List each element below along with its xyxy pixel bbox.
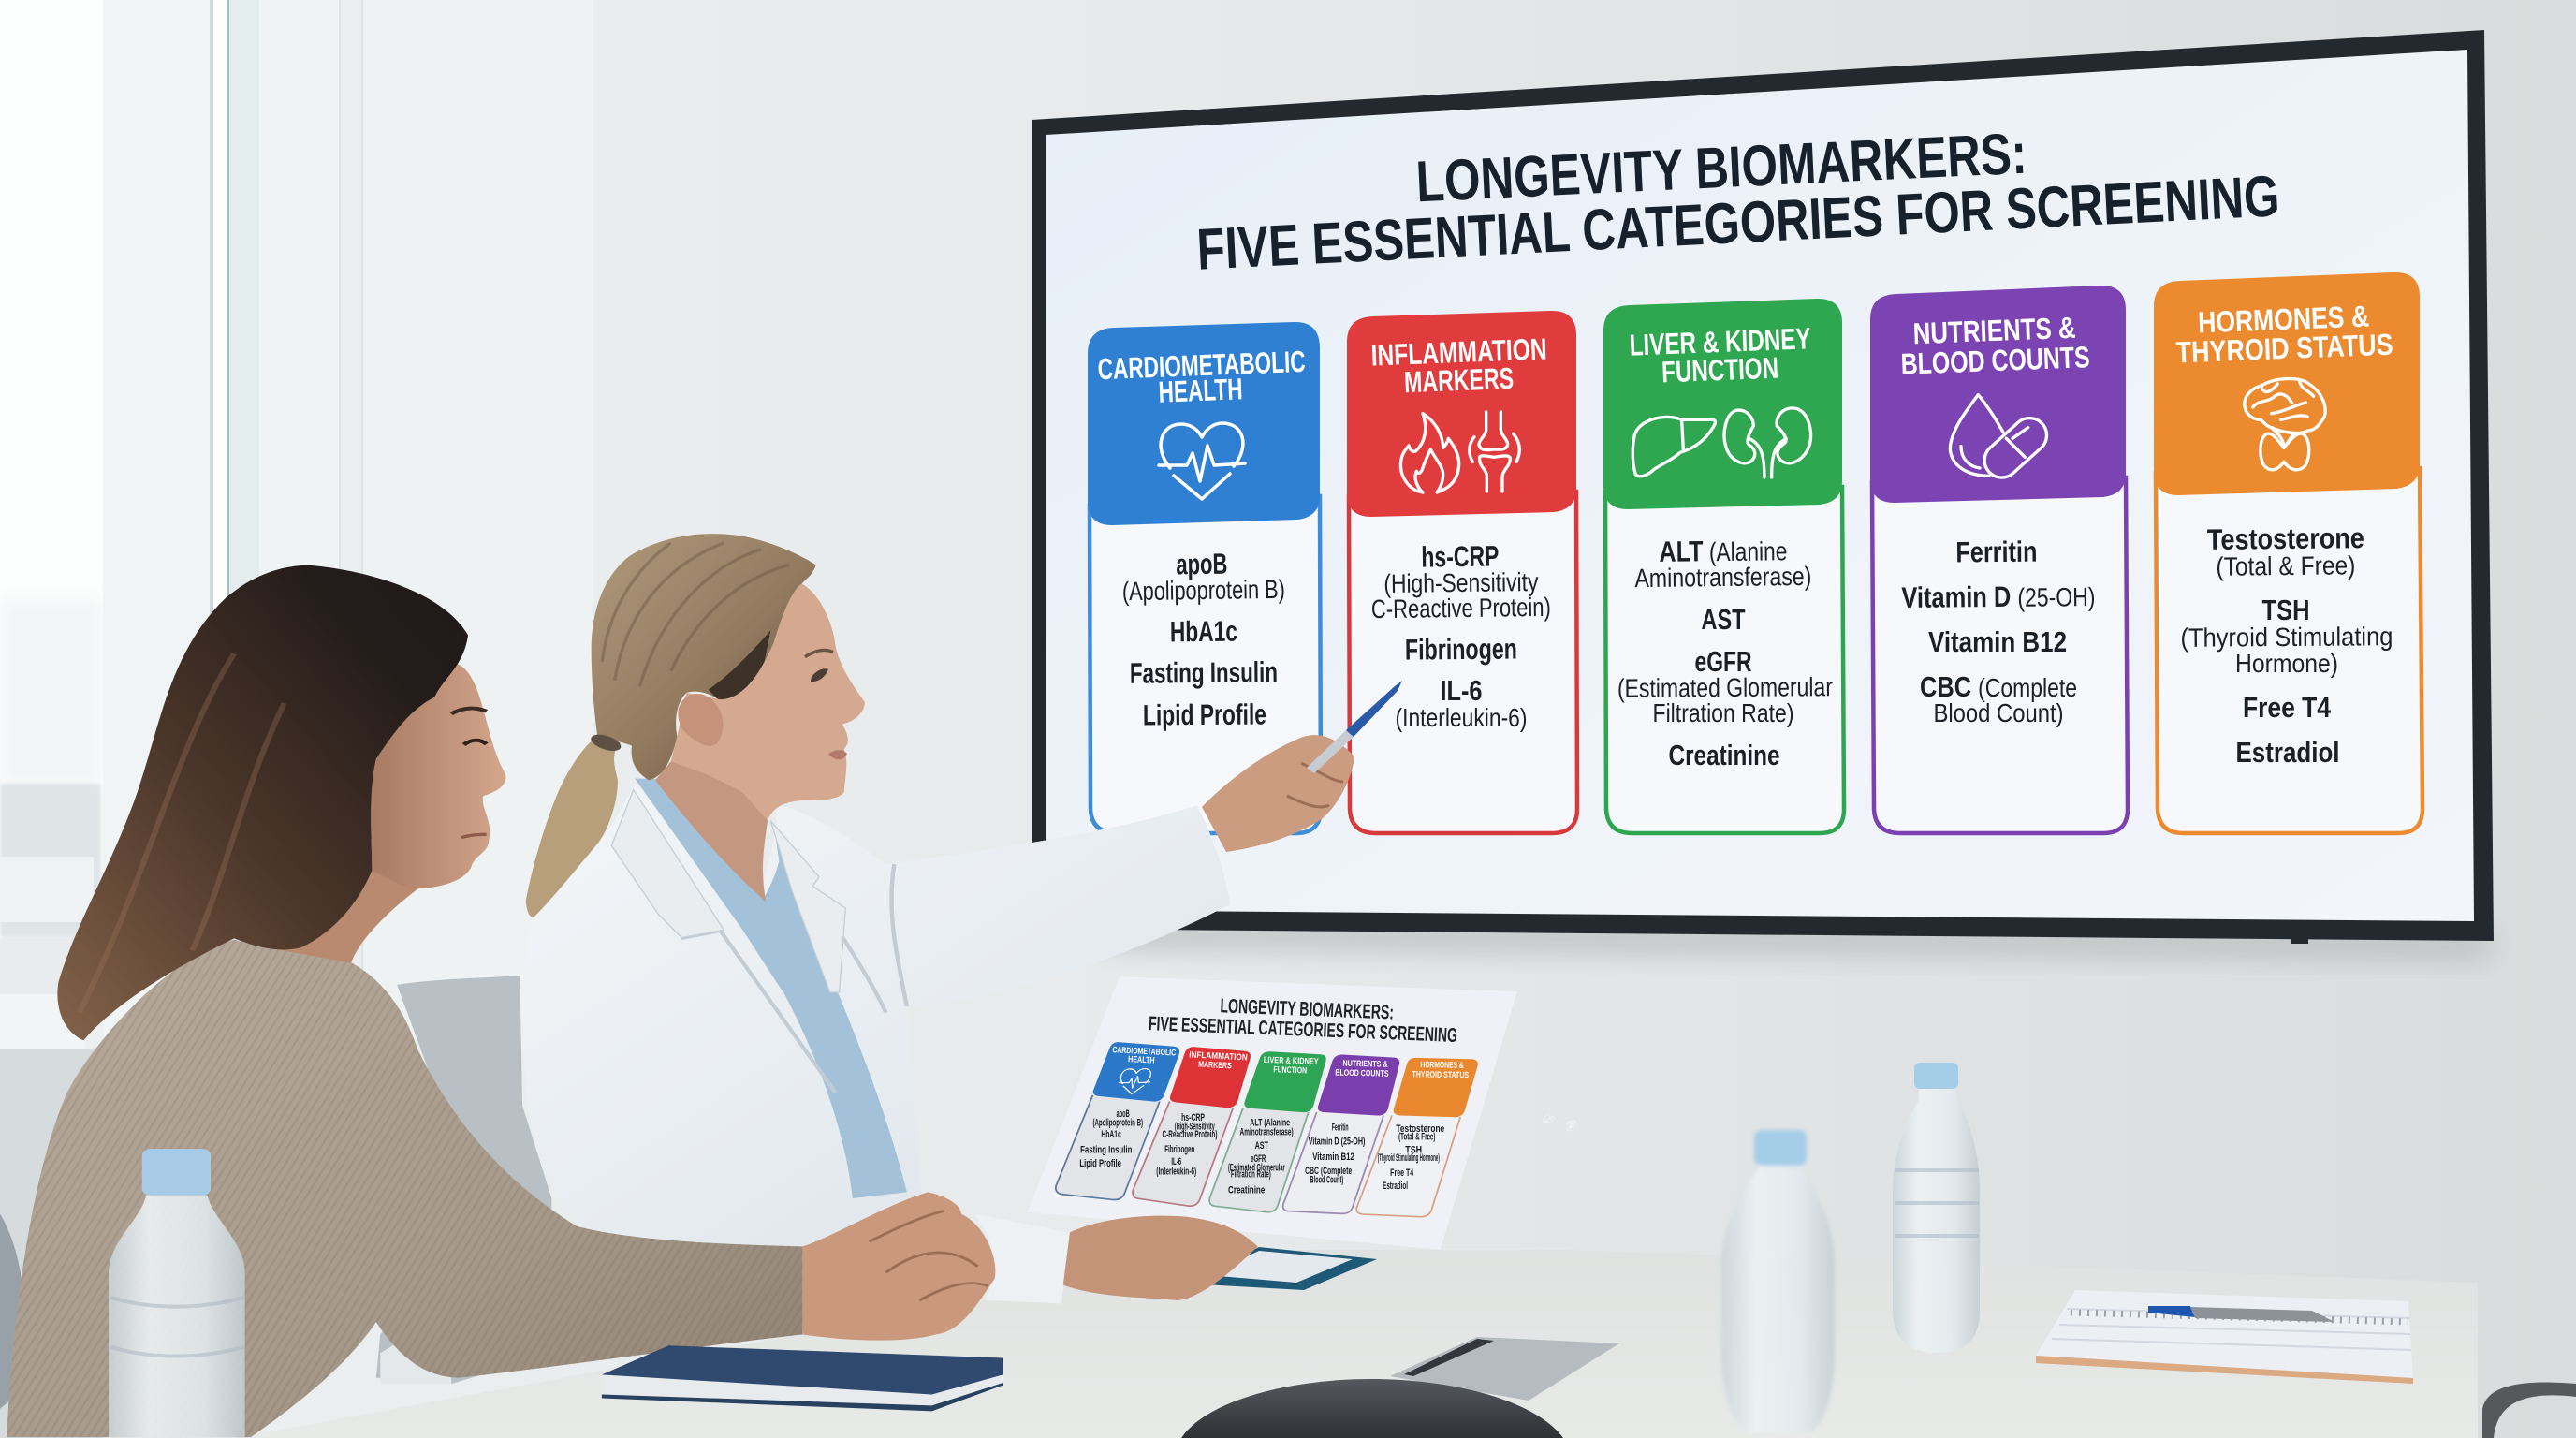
ear — [678, 694, 723, 746]
header: inflammation: INFLAMMATION — [1370, 331, 1547, 373]
biomarker list: Lipid Profile — [1143, 698, 1266, 731]
biomarker list: (Estimated Glomerular — [1617, 672, 1833, 703]
window and frame — [0, 0, 593, 1438]
biomarker list: Vitamin B12 — [1928, 625, 2067, 658]
panel: inflammation markers — [1347, 311, 1577, 833]
coat collar left — [611, 789, 724, 938]
coat body — [522, 784, 1230, 1247]
hair — [592, 534, 816, 780]
biomarker list: (Total & Free) — [2216, 550, 2356, 581]
ponytail — [526, 737, 621, 917]
hair shadow — [709, 630, 770, 699]
speakerphone — [1181, 1379, 1563, 1438]
header: cardiometabolic: HEALTH — [1158, 372, 1243, 409]
handout title — [1148, 994, 1457, 1047]
hair strands — [602, 543, 789, 686]
biomarker list: Vitamin D (25-OH) — [1901, 580, 2096, 614]
handout card: inflammation — [1133, 1047, 1335, 1206]
biomarker list: Testosterone — [2207, 521, 2364, 556]
icon: heart with pulse — [1159, 423, 1245, 499]
table — [234, 1250, 2478, 1438]
header: hormones: HORMONES & — [2197, 300, 2370, 340]
eyebrow — [451, 709, 487, 713]
handout card: cardiometabolic: Fasting Insulin — [1080, 1145, 1132, 1155]
biomarker list: Aminotransferase) — [1634, 562, 1812, 593]
sweater — [7, 940, 807, 1437]
biomarker list: TSH — [2261, 594, 2310, 626]
tv title: LONGEVITY BIOMARKERS: — [1414, 122, 2028, 214]
handout card: inflammation: C-Reactive Protein) — [1163, 1129, 1218, 1140]
icon: liver and kidneys — [1632, 408, 1810, 477]
biomarker list: Hormone) — [2235, 649, 2338, 678]
handout card: hormones: Free T4 — [1390, 1167, 1414, 1179]
handout card: hormones: THYROID STATUS — [1412, 1070, 1470, 1080]
face — [371, 662, 506, 888]
handout card: liver and kidney: AST — [1255, 1140, 1268, 1152]
handout card: inflammation: hs-CRP — [1181, 1112, 1205, 1123]
handout title: LONGEVITY BIOMARKERS: — [1220, 994, 1395, 1023]
handout card: liver and kidney — [1209, 1051, 1351, 1212]
biomarker list: Free T4 — [2243, 691, 2332, 724]
biomarker list: HbA1c — [1170, 615, 1237, 648]
hair strands — [80, 653, 285, 1013]
header: inflammation: MARKERS — [1403, 361, 1515, 399]
handout sheet — [1028, 976, 1577, 1250]
sweater ribs — [7, 940, 807, 1437]
panel: hormones and thyroid status — [2154, 272, 2422, 833]
mouth — [461, 834, 487, 838]
neck — [655, 761, 768, 902]
tv shadow — [1039, 922, 2490, 955]
handout card: cardiometabolic: CARDIOMETABOLIC — [1112, 1046, 1176, 1058]
coat folds — [681, 864, 907, 1093]
neck — [251, 852, 417, 963]
handout card: liver and kidney: Filtration Rate) — [1231, 1169, 1271, 1180]
biomarker list: Fibrinogen — [1405, 632, 1517, 667]
pen — [1307, 681, 1402, 773]
biomarker list — [2180, 521, 2393, 769]
panel: cardiometabolic health — [1088, 322, 1321, 833]
handout card: hormones: Testosterone — [1396, 1123, 1444, 1135]
dark hair — [57, 565, 468, 1040]
water bottle back — [1893, 1063, 1980, 1353]
handout card: liver and kidney: Creatinine — [1228, 1185, 1265, 1196]
tablet — [1390, 1337, 1619, 1401]
handout card: cardiometabolic: HbA1c — [1101, 1129, 1121, 1140]
clasped hands — [802, 1192, 995, 1341]
shirt collar — [635, 779, 830, 992]
biomarker list: IL-6 — [1440, 674, 1483, 707]
people, chairs and notebook — [0, 784, 1258, 1409]
panel: liver and kidney function — [1603, 299, 1844, 833]
water bottle front — [1721, 1130, 1835, 1432]
handout card: nutrients: Vitamin B12 — [1312, 1152, 1354, 1163]
tv indicator — [2291, 939, 2308, 944]
biomarker list: Blood Count) — [1934, 698, 2063, 727]
header: liver and kidney — [1603, 299, 1842, 509]
biomarker list — [1901, 536, 2096, 727]
handout card: nutrients: Blood Count) — [1310, 1175, 1343, 1185]
biomarker list: AST — [1702, 603, 1746, 636]
header: hormones: THYROID STATUS — [2175, 328, 2393, 369]
header: hormones — [2154, 272, 2420, 495]
raised hand — [1202, 735, 1354, 852]
lower hand — [1063, 1216, 1258, 1300]
handout card: cardiometabolic: HEALTH — [1128, 1054, 1155, 1065]
header: liver and kidney: LIVER & KIDNEY — [1629, 321, 1811, 362]
handout card: liver and kidney: eGFR — [1251, 1153, 1266, 1165]
handout card: nutrients: Ferritin — [1332, 1123, 1349, 1133]
handout card: nutrients: Vitamin D (25-OH) — [1309, 1137, 1366, 1147]
tv title: FIVE ESSENTIAL CATEGORIES FOR SCREENING — [1195, 164, 2281, 283]
blue shirt lower — [744, 852, 907, 1198]
chair arm right — [2482, 1382, 2576, 1438]
face — [671, 583, 865, 821]
presenter head — [526, 534, 865, 992]
biomarker list — [1371, 539, 1551, 732]
biomarker list: CBC (Complete — [1920, 670, 2077, 703]
notepad with pen — [2036, 1290, 2413, 1384]
biomarker list: hs-CRP — [1421, 539, 1500, 574]
header: nutrients: NUTRIENTS & — [1912, 311, 2076, 350]
handout card: cardiometabolic: Lipid Profile — [1079, 1158, 1121, 1169]
biomarker list — [1617, 534, 1833, 771]
seated woman — [7, 565, 1003, 1437]
header: cardiometabolic — [1088, 322, 1320, 525]
presenter white coat — [522, 784, 1258, 1303]
panel: nutrients and blood counts — [1870, 286, 2128, 833]
chair left — [0, 1214, 24, 1409]
tv title — [1195, 122, 2281, 283]
biomarker list: Ferritin — [1955, 536, 2038, 568]
tv screen — [1046, 50, 2474, 921]
eye — [811, 668, 828, 682]
handout card: hormones: (Thyroid Stimulating Hormone) — [1378, 1152, 1440, 1164]
hair tie — [589, 731, 622, 754]
biomarker list: (Interleukin-6) — [1395, 703, 1528, 732]
eye — [464, 741, 487, 744]
biomarker list: (High-Sensitivity — [1383, 567, 1539, 598]
handout card: inflammation: (Interleukin-6) — [1156, 1167, 1196, 1177]
icon: flame and joint — [1400, 412, 1519, 492]
handout card: hormones: (Total & Free) — [1398, 1132, 1436, 1142]
handout card: hormones: TSH — [1405, 1145, 1422, 1155]
handout card: liver and kidney: (Estimated Glomerular — [1228, 1163, 1285, 1173]
header: liver and kidney: FUNCTION — [1661, 351, 1779, 389]
biomarker list: Estradiol — [2235, 736, 2340, 769]
handout card: inflammation: (High-Sensitivity — [1175, 1122, 1215, 1132]
handout card: inflammation: Fibrinogen — [1164, 1144, 1194, 1155]
biomarker list: (Apolipoprotein B) — [1122, 575, 1285, 606]
biomarker list — [1122, 548, 1285, 731]
clipboard — [1198, 1247, 1377, 1290]
biomarker list: eGFR — [1694, 645, 1752, 678]
header: inflammation — [1347, 311, 1576, 517]
chair behind presenter — [376, 976, 551, 1384]
biomarker list: (Thyroid Stimulating — [2180, 622, 2393, 653]
handout card: hormones: HORMONES & — [1420, 1060, 1464, 1071]
icon: brain and thyroid — [2245, 379, 2325, 470]
eyebrow — [805, 651, 833, 657]
handout card: liver and kidney: LIVER & KIDNEY — [1264, 1055, 1319, 1067]
handout card: nutrients: BLOOD COUNTS — [1335, 1068, 1389, 1079]
handout card: inflammation: MARKERS — [1198, 1060, 1232, 1071]
handout card: liver and kidney: FUNCTION — [1273, 1065, 1307, 1076]
biomarker list: Fasting Insulin — [1130, 655, 1278, 690]
handout card: cardiometabolic — [1056, 1042, 1179, 1200]
handout card: nutrients — [1283, 1055, 1557, 1213]
biomarker list: ALT (Alanine — [1659, 534, 1788, 568]
header: nutrients: BLOOD COUNTS — [1900, 340, 2090, 381]
header: nutrients — [1870, 286, 2126, 503]
icon: drop and capsule — [1950, 395, 2054, 485]
tv bezel — [1032, 30, 2494, 941]
biomarker list: Filtration Rate) — [1653, 698, 1793, 727]
chair base — [380, 1325, 451, 1384]
handout card: cardiometabolic: apoB — [1116, 1108, 1130, 1120]
handout card: liver and kidney: Aminotransferase) — [1240, 1127, 1294, 1137]
handout card: nutrients: NUTRIENTS & — [1342, 1059, 1388, 1070]
handout card: hormones — [1356, 1058, 1577, 1217]
television — [1032, 30, 2494, 955]
mouth — [828, 750, 847, 759]
handout card: liver and kidney: ALT (Alanine — [1250, 1118, 1290, 1128]
header: cardiometabolic: CARDIOMETABOLIC — [1097, 345, 1306, 386]
biomarker list: C-Reactive Protein) — [1371, 593, 1551, 624]
handout card: cardiometabolic: (Apolipoprotein B) — [1092, 1118, 1143, 1128]
handout card: hormones: Estradiol — [1383, 1181, 1408, 1192]
handout card: inflammation: INFLAMMATION — [1189, 1050, 1248, 1063]
water bottle front left — [109, 1149, 245, 1437]
biomarker list: apoB — [1176, 548, 1228, 580]
sleeve cuff — [973, 1214, 1070, 1303]
coat collar right — [770, 821, 845, 992]
handout title: FIVE ESSENTIAL CATEGORIES FOR SCREENING — [1148, 1012, 1457, 1047]
handout card: nutrients: CBC (Complete — [1305, 1166, 1352, 1177]
handout card: inflammation: IL-6 — [1171, 1156, 1181, 1167]
biomarker list: Creatinine — [1668, 739, 1780, 771]
notebook — [602, 1345, 1003, 1411]
